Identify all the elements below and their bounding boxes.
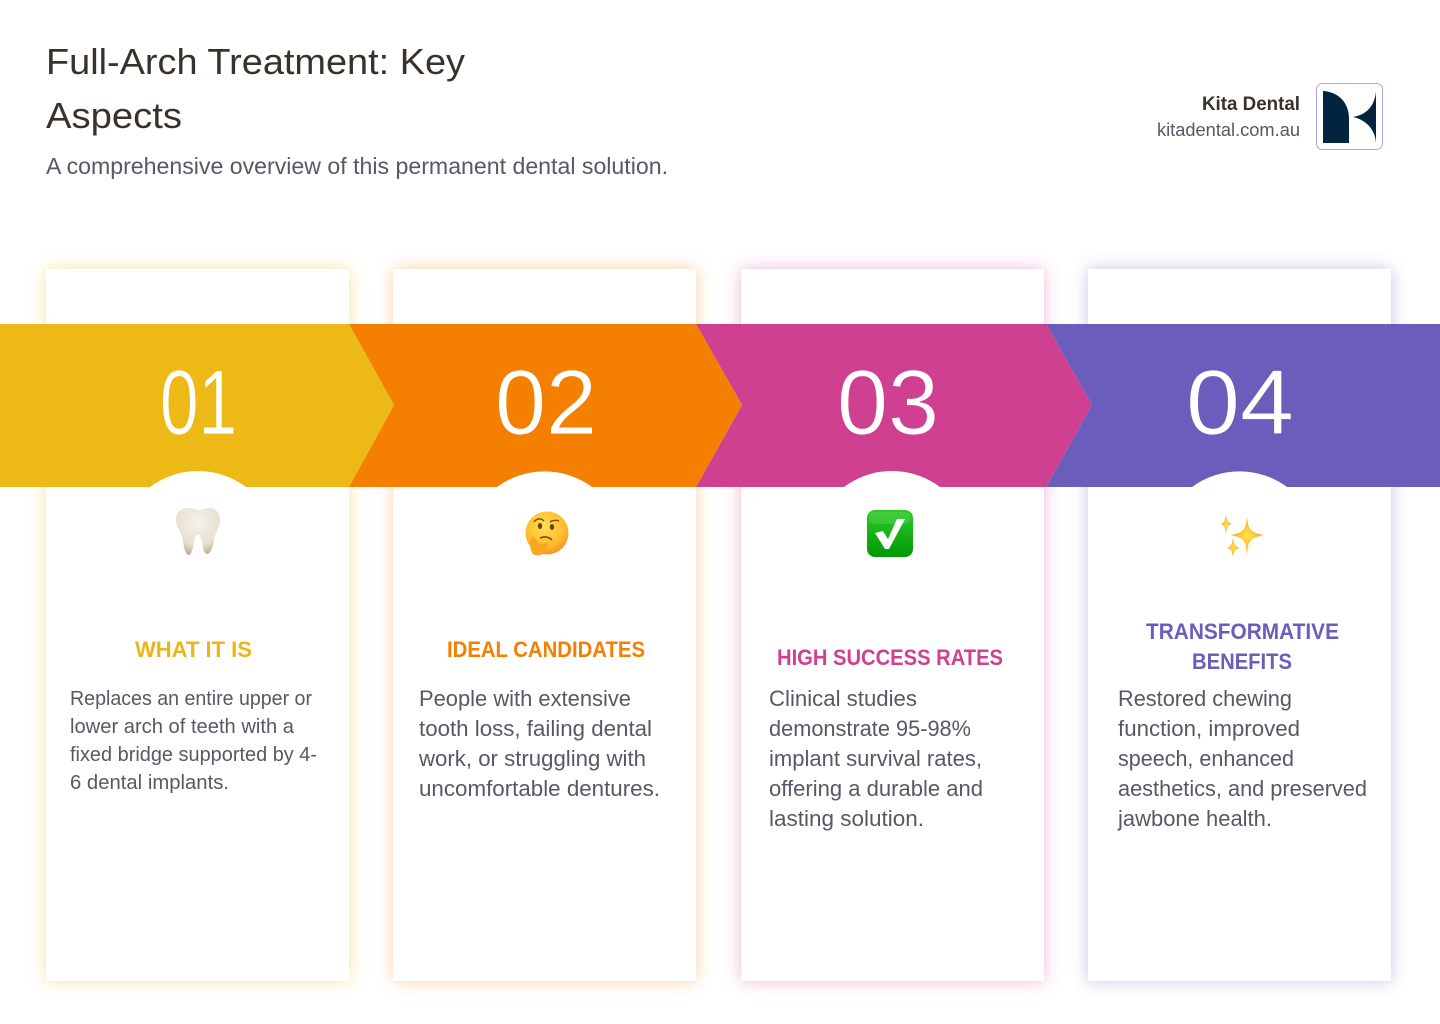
text block: card 4 [1117, 686, 1367, 831]
text block: card 4: aesthetics, and preserved [1118, 776, 1367, 801]
notch 4 [1192, 471, 1287, 487]
text block: card 4: jawbone health. [1117, 806, 1272, 831]
text block: card 1: fixed bridge supported by 4- [70, 743, 317, 766]
heading: transformative benefits: TRANSFORMATIVE [1146, 619, 1339, 644]
icon: check mark [867, 510, 913, 557]
number 04: 04 [1186, 352, 1294, 454]
notch 1 [150, 471, 246, 487]
text block: card 2: work, or struggling with [418, 746, 646, 771]
text block: card 1 [70, 687, 317, 794]
text block: card 3: lasting solution. [769, 806, 924, 831]
text block: card 3: demonstrate 95-98% [769, 716, 971, 741]
icon: Kita Dental logo [1316, 84, 1382, 150]
heading: what it is: WHAT IT IS [135, 637, 252, 662]
text block: card 1: lower arch of teeth with a [70, 715, 295, 738]
panel: card 4 [1088, 269, 1391, 981]
panel: card 3 [741, 269, 1044, 981]
panel: card 2 [393, 269, 696, 981]
text block: card 2: People with extensive [419, 686, 631, 711]
brand block [1157, 84, 1382, 150]
arrow band 1 [0, 324, 394, 487]
subtitle: A comprehensive overview of this permanent dental solution. [46, 153, 668, 179]
title: Full-Arch Treatment: Key [46, 41, 465, 82]
number 03: 03 [837, 352, 939, 454]
title [46, 41, 465, 136]
text block: card 3: Clinical studies [769, 686, 917, 711]
text block: card 2 [418, 686, 660, 801]
heading: transformative benefits [1146, 619, 1339, 674]
heading: transformative benefits: BENEFITS [1192, 649, 1292, 674]
title: Aspects [46, 95, 182, 136]
icon: sparkles [1221, 515, 1264, 557]
notch 3 [844, 471, 940, 487]
text block: card 2: tooth loss, failing dental [419, 716, 652, 741]
text block: card 3: offering a durable and [769, 776, 983, 801]
text block: card 1: 6 dental implants. [70, 771, 229, 794]
icon: tooth [176, 508, 220, 555]
text block: card 1: Replaces an entire upper or [70, 687, 312, 710]
number 02: 02 [495, 352, 597, 454]
arrow band 3 [696, 324, 1092, 487]
heading: high success rates: HIGH SUCCESS RATES [777, 645, 1003, 670]
icon: thinking face [526, 512, 568, 555]
text block: card 3: implant survival rates, [769, 746, 982, 771]
number 01: 01 [160, 352, 237, 454]
text block: card 4: function, improved [1118, 716, 1300, 741]
arrow band 2 [349, 324, 742, 487]
brand url: kitadental.com.au [1157, 120, 1300, 140]
arrow band 4 [1046, 324, 1440, 487]
brand name: Kita Dental [1202, 93, 1300, 115]
text block: card 4: Restored chewing [1118, 686, 1292, 711]
notch 2 [497, 471, 592, 487]
text block: card 4: speech, enhanced [1118, 746, 1294, 771]
heading: ideal candidates: IDEAL CANDIDATES [447, 637, 645, 662]
text block: card 2: uncomfortable dentures. [419, 776, 660, 801]
panel: card 1 [46, 269, 349, 981]
text block: card 3 [769, 686, 983, 831]
